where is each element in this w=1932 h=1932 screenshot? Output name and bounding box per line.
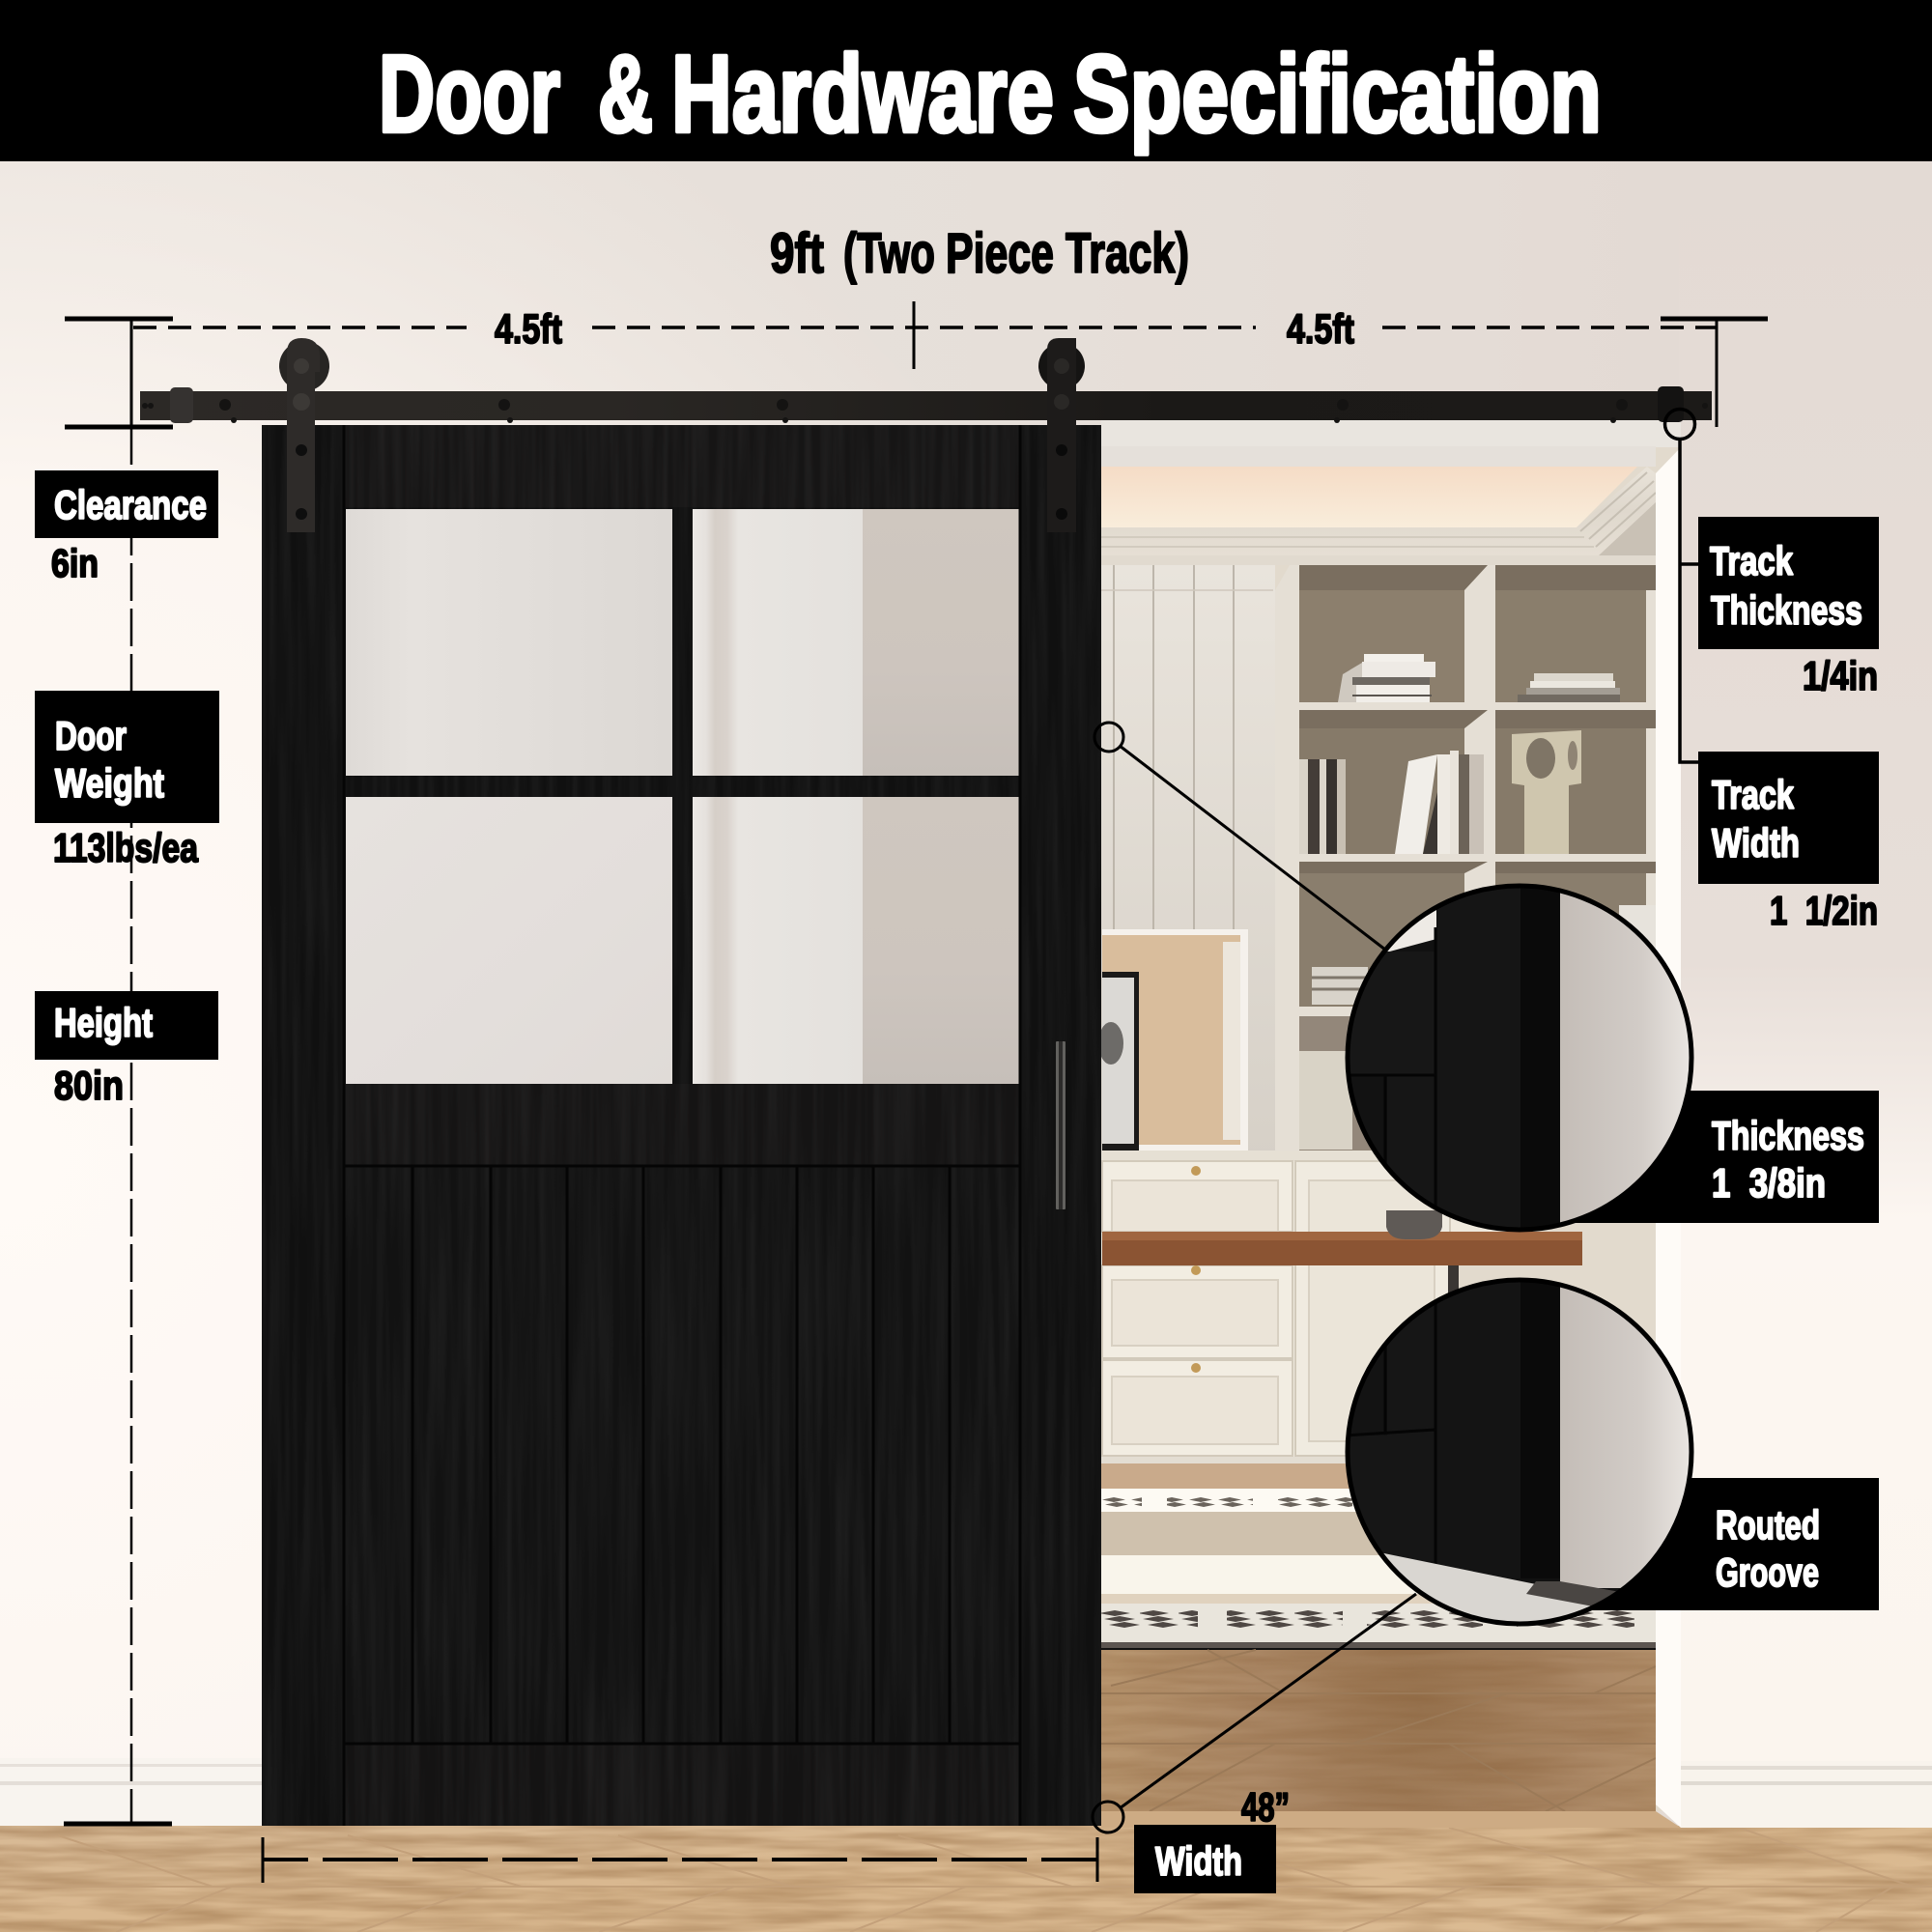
value: clearance 6in: 6in <box>51 541 99 585</box>
label: track thickness: Track <box>1710 538 1793 583</box>
desk <box>1102 1232 1582 1296</box>
value: height: 80in <box>54 1063 124 1108</box>
hanger: left <box>279 338 329 532</box>
glass panes <box>346 509 1020 1084</box>
label: track width: Track <box>1712 772 1794 817</box>
door <box>262 425 1101 1826</box>
panelled wall <box>1101 565 1275 1165</box>
label box: routed groove <box>1546 1478 1879 1610</box>
ceiling glow <box>1101 467 1637 527</box>
floor <box>0 1826 1932 1932</box>
track bolts <box>142 399 1708 423</box>
room floor and rug <box>1101 1457 1681 1828</box>
text: thickness label: Thickness <box>1712 1113 1864 1158</box>
label: width: Width <box>1155 1838 1242 1884</box>
label: height <box>35 991 218 1060</box>
lintel and soffit <box>1101 420 1681 467</box>
heading: total track length: Piece <box>946 222 1054 285</box>
title banner: Hardware <box>671 33 1054 155</box>
dimension lines: track and door height <box>64 301 1768 1824</box>
text: routed groove label: Routed <box>1716 1502 1820 1548</box>
dimension label: left track section: 4.5ft <box>495 306 562 353</box>
label box: thickness <box>1546 1091 1879 1223</box>
value: door weight: 113lbs/ea <box>53 825 199 870</box>
label: track width <box>1698 752 1879 884</box>
photo: room seen through the opening <box>1098 420 1681 1828</box>
value: width: 48” <box>1241 1784 1290 1830</box>
art frames <box>1098 929 1248 1151</box>
track stop: right <box>1658 386 1684 422</box>
callout connector: routed groove <box>1093 1594 1416 1833</box>
label: track thickness <box>1698 517 1879 649</box>
detail circle: routed groove <box>1346 1279 1695 1633</box>
cabinets <box>1101 1151 1517 1457</box>
baseboard: right <box>1681 1761 1932 1828</box>
text: thickness label <box>1712 1113 1864 1206</box>
value: track thickness: 1/4in <box>1803 653 1878 698</box>
wood grain <box>262 425 1101 1826</box>
plank seams <box>344 425 1020 1826</box>
label: door weight <box>35 691 219 823</box>
label: width <box>1134 1825 1276 1893</box>
detail circle: door thickness <box>1346 883 1695 1236</box>
heading: total track length: (Two <box>843 222 935 285</box>
hanger: right <box>1038 338 1085 532</box>
books and sculpture <box>1299 654 1656 1150</box>
label: track width: Width <box>1712 820 1800 866</box>
value: track width: 1 1/2in <box>1770 888 1878 933</box>
callout connector: track <box>1665 410 1698 762</box>
door handle <box>1056 1041 1065 1209</box>
far wall behind table <box>1450 1232 1656 1489</box>
text: routed groove label: Groove <box>1716 1549 1819 1595</box>
door jamb <box>1656 447 1681 1828</box>
label: door weight: Door <box>55 713 127 758</box>
mug <box>1386 1210 1442 1239</box>
label: door weight: Weight <box>55 760 164 806</box>
text: routed groove label <box>1716 1502 1820 1595</box>
label: clearance <box>35 470 218 538</box>
title banner: Specification <box>1073 33 1602 155</box>
barn door track <box>140 386 1712 423</box>
label: height: Height <box>54 1000 153 1045</box>
callout connector: thickness <box>1094 723 1385 950</box>
bookcase <box>1275 565 1656 1162</box>
label: track thickness: Thickness <box>1711 587 1862 633</box>
title banner: & <box>598 33 653 155</box>
heading: total track length: 9ft <box>770 222 824 285</box>
label: clearance: Clearance <box>54 482 207 527</box>
title banner <box>0 0 1932 161</box>
title banner: Door <box>379 33 560 155</box>
baseboard: left <box>0 1758 263 1826</box>
heading: total track length <box>770 222 1189 285</box>
text: thickness label: 1 3/8in <box>1712 1160 1826 1206</box>
track stop: left <box>170 387 193 423</box>
heading: total track length: Track) <box>1065 222 1189 285</box>
door stiles and rails <box>344 425 1020 1826</box>
dimension line: door width <box>263 1837 1097 1883</box>
dimension label: right track section: 4.5ft <box>1287 306 1354 353</box>
crown moulding <box>1101 467 1656 565</box>
